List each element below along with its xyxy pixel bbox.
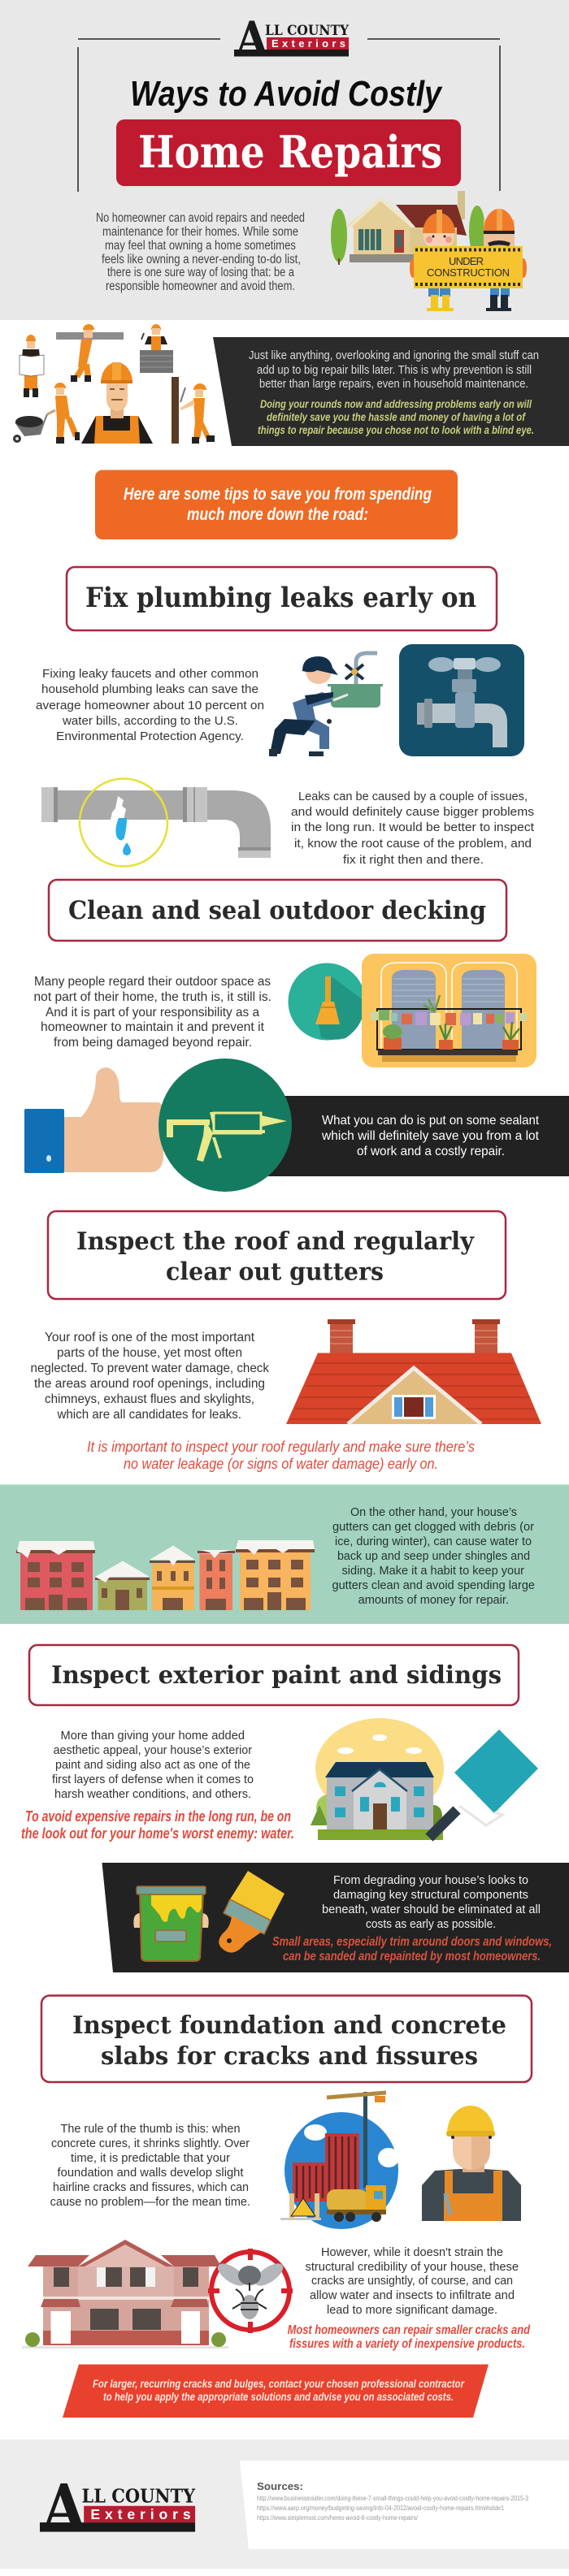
- text: paint callout: [21, 1808, 294, 1842]
- icon: caulk gun: [167, 1112, 287, 1162]
- heading: fix plumbing: [67, 567, 497, 630]
- text: gutters para: On the other hand, your house’s: [350, 1505, 517, 1519]
- text: paint para: [52, 1729, 254, 1801]
- text: plumbing para 2: Leaks can be caused by a couple of issues,: [298, 790, 528, 803]
- text: decking para: [34, 975, 271, 1050]
- text: sources: [257, 2481, 528, 2522]
- text: foundation para 2: [306, 2246, 519, 2317]
- icon: faucet tile: [399, 644, 524, 756]
- text: paint para: More than giving your home added: [60, 1729, 245, 1743]
- text: plumbing para 2: in the long run. It would be better to inspect: [291, 820, 535, 834]
- icon: insect in crosshair: [208, 2249, 293, 2333]
- text: foundation para 1: foundation and walls develop slight: [57, 2167, 244, 2180]
- callout: orange tips box: Here are some tips to save you from spending: [124, 485, 432, 504]
- text: roof callout: [87, 1439, 475, 1472]
- text: plumbing para 1: average homeowner about 10 percent on: [36, 699, 264, 712]
- icon: broom: [288, 963, 366, 1040]
- text: intro: [96, 211, 305, 293]
- text: plumbing para 1: Fixing leaky faucets and other common: [42, 667, 258, 681]
- sign: under construction: CONSTRUCTION: [427, 266, 510, 279]
- illustration: pink house: [22, 2240, 228, 2349]
- heading: clean and seal: [49, 880, 506, 941]
- text: roof para: chimneys, exhaust flues and skylights,: [45, 1392, 254, 1406]
- text: roof para: the areas around roof openings, including: [34, 1377, 265, 1391]
- text: foundation para 1: cause no problem—for the mean time.: [50, 2196, 250, 2209]
- illustration: balcony with plants: [362, 954, 536, 1067]
- text: plumbing para 2: [291, 790, 535, 867]
- worker with bricks: [140, 324, 173, 373]
- sign: under construction: [414, 246, 523, 288]
- callout: orange tips box: much more down the road:: [187, 505, 368, 524]
- illustration: grey house and sun: [311, 1718, 444, 1840]
- text: foundation callout: fissures with a variety of inexpensive products.: [289, 2337, 525, 2351]
- title: ways to avoid costly: Ways to Avoid Costly: [130, 74, 443, 114]
- text: decking para: homeowner to maintain it and prevent it: [41, 1020, 265, 1034]
- text: plumbing para 2: fix it right then and there.: [343, 853, 484, 867]
- heading: inspect paint: Inspect exterior paint and sidings: [51, 1661, 502, 1690]
- text: foundation para 1: The rule of the thumb is this: when: [60, 2123, 241, 2136]
- worker reading: [20, 335, 44, 397]
- callout: dark text band: [213, 337, 569, 446]
- text: intro: No homeowner can avoid repairs and needed: [96, 211, 305, 225]
- callout: red contractor band: to help you apply the appropriate solutions and advise you on associated costs.: [103, 2391, 454, 2403]
- panel: workers band: [13, 324, 569, 446]
- text: water para: costs as early as possible.: [366, 1917, 496, 1931]
- text: foundation para 1: [50, 2123, 250, 2209]
- worker with wheelbarrow: [13, 383, 80, 444]
- text: paint para: aesthetic appeal, your house’s exterior: [54, 1743, 252, 1757]
- text: water para: [272, 1873, 552, 1963]
- callout: red contractor band: [63, 2364, 489, 2418]
- illustration: construction site: [280, 2092, 399, 2229]
- title: home repairs: Home Repairs: [138, 126, 442, 178]
- sign: under construction: UNDER: [449, 255, 484, 267]
- text: gutters para: back up and seep under shingles and: [337, 1549, 530, 1563]
- text: decking para: from being damaged beyond repair.: [54, 1036, 252, 1050]
- text: intro: feels like owning a never-ending to-do list,: [102, 253, 301, 266]
- text: foundation para 2: lead to more significant damage.: [327, 2304, 497, 2317]
- logo: All County Exteriors footer: [40, 2470, 196, 2546]
- heading: inspect paint: [29, 1645, 519, 1705]
- text: water para: From degrading your house’s looks to: [333, 1873, 528, 1887]
- text: intro: maintenance for their homes. While some: [102, 225, 298, 239]
- illustration: workers with sign: [410, 209, 527, 311]
- illustration: engineer: [422, 2106, 521, 2221]
- text: gutters para: gutters can get clogged with debris (or: [332, 1520, 534, 1534]
- text: foundation para 1: time, it is predictable that your: [71, 2152, 230, 2165]
- illustration: snowy houses: [16, 1540, 315, 1610]
- panel: water band: [102, 1863, 569, 1972]
- text: plumbing para 1: [36, 667, 264, 743]
- text: paint callout: the look out for your home's worst enemy: water.: [21, 1825, 294, 1842]
- illustration: plumber at sink: [269, 653, 383, 756]
- text: sources: Sources:: [257, 2481, 303, 2492]
- icon: paint brush: [219, 1871, 284, 1953]
- text: intro: may feel that owning a home sometimes: [105, 239, 296, 253]
- text: intro: there is one sure way of losing that: be a: [107, 266, 294, 279]
- text: foundation para 2: cracks are unsightly, of course, and can: [311, 2275, 513, 2288]
- illustration: leaking pipe: [41, 778, 271, 866]
- illustration: roof with dormer: [286, 1319, 541, 1424]
- panel: footer: [0, 2440, 569, 2569]
- logo: All County Exteriors footer: A: [41, 2470, 87, 2546]
- text: sealant: [321, 1114, 540, 1158]
- text: roof para: Your roof is one of the most important: [45, 1331, 255, 1344]
- callout: dark text band: better than large repairs, even in household maintenance.: [259, 378, 528, 391]
- text: plumbing para 2: it, know the root cause of the problem, and: [294, 837, 532, 851]
- heading: inspect roof: [48, 1211, 506, 1299]
- text: gutters para: gutters clean and avoid spending large: [332, 1578, 535, 1592]
- callout: dark text band: add up to big repair bills later. This is why prevention is still: [257, 364, 532, 377]
- text: paint para: first layers of defense when it comes to: [52, 1773, 254, 1786]
- text: plumbing para 1: water bills, according to the U.S.: [62, 714, 238, 728]
- heading: inspect roof: clear out gutters: [166, 1258, 384, 1287]
- logo: All County Exteriors: LL COUNTY: [265, 23, 350, 39]
- heading: fix plumbing: Fix plumbing leaks early on: [85, 582, 476, 614]
- text: decking para: Many people regard their outdoor space as: [34, 975, 271, 989]
- icon: paint bucket: [133, 1886, 209, 1961]
- text: water para: damaging key structural components: [333, 1888, 528, 1902]
- text: roof para: neglected. To prevent water damage, check: [31, 1362, 270, 1375]
- logo: All County Exteriors: A: [235, 11, 269, 67]
- icon: paint roller: [429, 1730, 538, 1838]
- text: water para: beneath, water should be eliminated at all: [322, 1903, 541, 1916]
- text: paint para: paint and siding also act as one of the: [55, 1758, 250, 1772]
- worker hammering post: [172, 377, 215, 444]
- text: sources: http://www.businessinsider.com/doing-these-7-small-things-could-help-you-avoid-costly-home-repairs-2015-3: [257, 2495, 528, 2502]
- text: sealant: which will definitely save you from a lot: [321, 1129, 540, 1143]
- heading: inspect roof: Inspect the roof and regularly: [76, 1227, 476, 1256]
- text: decking para: And it is part of your responsibility as a: [46, 1006, 259, 1020]
- text: roof callout: It is important to inspect your roof regularly and make sure there’s: [87, 1439, 475, 1455]
- worker carrying plank: [56, 324, 124, 382]
- callout: orange tips box: [95, 470, 458, 539]
- text: sources: https://www.simplemost.com/heres-avoid-6-costly-home-repairs/: [257, 2514, 419, 2522]
- heading: clean and seal: Clean and seal outdoor decking: [68, 896, 486, 925]
- worker portrait: [81, 362, 153, 444]
- heading: inspect foundation: [41, 1995, 532, 2082]
- text: plumbing para 2: and would definitely cause bigger problems: [291, 805, 534, 819]
- text: roof para: which are all candidates for leaks.: [57, 1408, 241, 1422]
- logo: All County Exteriors footer: LL COUNTY: [81, 2486, 196, 2508]
- text: plumbing para 1: Environmental Protection Agency.: [56, 730, 244, 743]
- illustration: construction workers: [13, 324, 215, 444]
- text: roof para: parts of the house, yet most often: [57, 1346, 242, 1360]
- text: sources: https://www.aarp.org/money/budgeting-saving/info-04-2012/avoid-costly-home-repairs.html#slide1: [257, 2505, 504, 2512]
- text: foundation para 2: However, while it doesn't strain the: [321, 2246, 503, 2259]
- text: intro: responsible homeowner and avoid them.: [106, 279, 295, 293]
- text: decking para: not part of their home, the truth is, it still is.: [34, 990, 271, 1004]
- panel: gutters band: [0, 1485, 569, 1624]
- text: foundation para 2: structural credibility of your house, these: [306, 2261, 519, 2274]
- logo: All County Exteriors: [234, 11, 350, 67]
- illustration: house: [331, 191, 485, 265]
- callout: red contractor band: For larger, recurring cracks and bulges, contact your chosen professional contractor: [93, 2378, 465, 2390]
- text: gutters para: ice, during winter), can cause water to: [335, 1535, 532, 1548]
- callout: dark text band: Just like anything, overlooking and ignoring the small stuff can: [249, 349, 539, 362]
- text: gutters para: [332, 1505, 535, 1607]
- text: foundation para 1: concrete cures, it shrinks slightly. Over: [51, 2137, 250, 2150]
- text: gutters para: siding. Make it a habit to keep your: [341, 1564, 524, 1578]
- logo: All County Exteriors: Exteriors: [271, 37, 345, 50]
- logo: All County Exteriors footer: Exteriors: [90, 2506, 191, 2522]
- text: gutters para: amounts of money for repair.: [358, 1593, 509, 1607]
- icon: thumbs up: [24, 1067, 163, 1173]
- text: foundation para 2: allow water and insects to infiltrate and: [310, 2289, 515, 2302]
- text: roof callout: no water leakage (or signs of water damage) early on.: [124, 1456, 438, 1472]
- heading: inspect foundation: slabs for cracks and fissures: [101, 2042, 478, 2071]
- text: paint callout: To avoid expensive repairs in the long run, be on: [25, 1808, 291, 1825]
- text: foundation para 1: hairline cracks and fissures, which can: [53, 2181, 249, 2194]
- text: sealant: What you can do is put on some sealant: [322, 1114, 540, 1128]
- text: paint para: harsh weather conditions, and others.: [54, 1787, 251, 1801]
- text: roof para: [31, 1331, 270, 1422]
- title: home repairs: [116, 119, 461, 186]
- callout: dark text band: definitely save you the hassle and money of having a lot of: [267, 411, 526, 423]
- panel: sealant band: [24, 1059, 569, 1192]
- heading: inspect foundation: Inspect foundation and concrete: [72, 2011, 506, 2040]
- text: foundation callout: [288, 2323, 530, 2351]
- text: plumbing para 1: household plumbing leaks can save the: [41, 682, 258, 696]
- text: sealant: of work and a costly repair.: [357, 1145, 505, 1158]
- panel: header: [0, 0, 569, 320]
